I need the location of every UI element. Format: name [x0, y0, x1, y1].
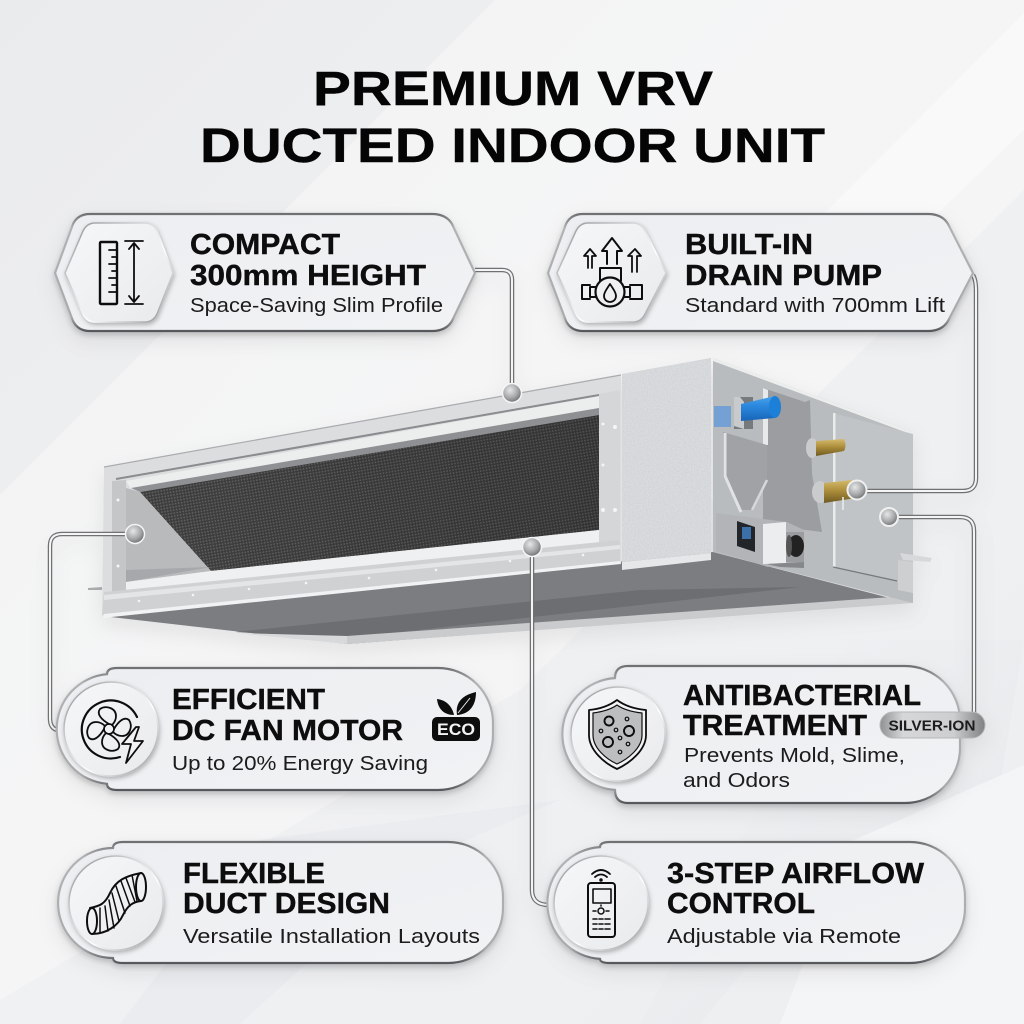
heading: EFFICIENT — [172, 684, 325, 716]
silver-ion tag — [880, 712, 985, 738]
icon: fan with bolt — [82, 700, 143, 763]
front panel with filter opening — [88, 375, 621, 618]
title — [200, 63, 825, 173]
panel: efficient DC fan motor — [57, 668, 493, 790]
description: Versatile Installation Layouts — [183, 925, 480, 948]
heading — [685, 229, 882, 292]
heading — [190, 229, 426, 292]
eco badge: ECO — [437, 720, 475, 739]
heading: ANTIBACTERIAL — [683, 680, 921, 712]
connector: airflow control — [532, 548, 549, 905]
drain pan plate — [763, 388, 822, 532]
icon badge — [557, 223, 666, 322]
heading: CONTROL — [667, 888, 815, 920]
icon: pump with arrows — [582, 238, 642, 306]
description — [683, 744, 905, 792]
connector: antibacterial — [889, 517, 974, 714]
panel: 3-step airflow control — [547, 842, 965, 963]
icon: ruler with height arrow — [100, 241, 143, 304]
description: Prevents Mold, Slime, — [684, 744, 905, 767]
control box with switch — [716, 513, 804, 568]
connector: drain pump — [857, 275, 976, 491]
funnel cover plate — [723, 432, 767, 512]
heading — [667, 858, 925, 920]
title: PREMIUM VRV — [313, 63, 713, 116]
panel: flexible duct design — [58, 842, 503, 963]
silver-ion tag: SILVER-ION — [888, 718, 976, 734]
heading: DUCT DESIGN — [183, 888, 390, 920]
heading: TREATMENT — [683, 710, 867, 742]
connector: compact height — [475, 270, 512, 393]
heading — [172, 684, 403, 747]
icon badge — [69, 856, 163, 950]
panel: antibacterial treatment — [562, 666, 985, 803]
mounting bracket — [898, 560, 913, 593]
heading: DRAIN PUMP — [685, 260, 882, 292]
icon: shield with germs — [589, 700, 646, 769]
connector dots — [126, 384, 898, 556]
brass refrigerant fittings — [806, 438, 856, 510]
galvanized end panel — [622, 358, 711, 562]
panel: compact 300mm height — [55, 214, 475, 331]
heading: FLEXIBLE — [183, 858, 325, 890]
title: DUCTED INDOOR UNIT — [200, 120, 825, 173]
side face with service panels — [713, 358, 932, 603]
heading: BUILT-IN — [685, 229, 813, 261]
icon: flexible duct — [87, 873, 146, 934]
underside of unit — [102, 552, 913, 644]
icon: remote control — [588, 870, 615, 937]
connector: fan motor — [50, 534, 135, 730]
description: and Odors — [683, 769, 790, 792]
heading: DC FAN MOTOR — [172, 715, 403, 747]
description: Adjustable via Remote — [667, 925, 901, 948]
heading: 300mm HEIGHT — [190, 260, 426, 292]
description: Space-Saving Slim Profile — [190, 294, 443, 317]
mesh air filter — [140, 415, 599, 571]
panel: built-in drain pump — [548, 214, 973, 331]
description: Standard with 700mm Lift — [685, 294, 945, 317]
icon badge — [554, 856, 648, 950]
access panel — [833, 413, 913, 590]
heading: 3-STEP AIRFLOW — [667, 858, 925, 890]
heading — [683, 680, 921, 742]
heading — [183, 858, 390, 920]
description: Up to 20% Energy Saving — [172, 752, 428, 775]
blue water pipe — [714, 396, 781, 429]
eco badge — [432, 692, 480, 741]
heading: COMPACT — [190, 229, 340, 261]
icon badge — [571, 687, 665, 781]
product illustration: ducted indoor unit — [50, 214, 985, 963]
icon badge — [64, 682, 158, 776]
icon badge — [65, 223, 173, 322]
